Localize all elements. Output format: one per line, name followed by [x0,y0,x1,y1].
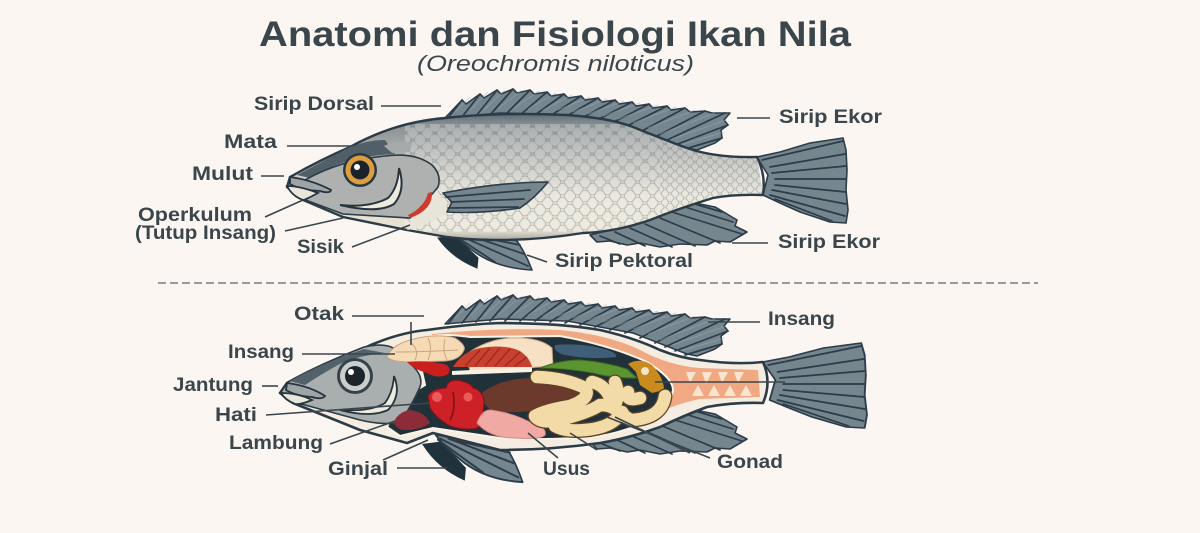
eye [337,358,373,394]
organ: blue kidney [555,344,616,358]
label: Lambung: Lambung [229,433,323,454]
label: Sirip Ekor lower: Sirip Ekor [778,232,881,253]
title: Anatomi dan Fisiologi Ikan Nila [259,15,852,54]
label: Mulut [192,164,284,185]
label: Jantung: Jantung [173,375,253,396]
organ: dark red lobe [394,410,430,430]
label: Mata: Mata [224,132,278,153]
label: Usus: Usus [543,459,590,480]
body cavity [387,335,673,439]
label: Operkulum [138,200,303,226]
external fish illustration [287,89,848,270]
label: Insang left: Insang [228,342,294,363]
label: Mata [224,132,352,153]
organ: heart [428,380,484,429]
subtitle: (Oreochromis niloticus) [417,51,694,76]
label: Insang right [708,309,835,330]
label: Mulut: Mulut [192,164,254,185]
pointer: tail muscle line [655,381,785,383]
label: Gonad: Gonad [717,452,783,473]
organ: red gills [452,347,532,375]
fish body outline [280,323,768,450]
label: Operkulum: Operkulum [138,205,252,226]
organ: pink stomach [477,410,545,439]
label: Hati [215,403,430,426]
label: Ginjal [328,440,447,480]
label: Sisik [297,225,410,258]
organ: brain [387,336,553,372]
label: Gonad [570,417,783,473]
label: Insang right: Insang [768,309,835,330]
muscle band [432,329,760,418]
fish head [297,140,450,230]
eye [343,153,377,187]
label: Tutup Insang [135,218,343,244]
label: Tutup Insang: (Tutup Insang) [135,223,276,244]
organ: brown liver [482,376,590,412]
label: Otak [294,304,424,345]
muscle teeth [686,372,752,396]
label: Ginjal: Ginjal [328,459,388,480]
organ: orange gland [628,361,664,393]
label: Otak: Otak [294,304,345,325]
label: Sisik: Sisik [297,237,344,258]
internal fish illustration [280,295,867,482]
mouth [287,177,331,200]
fish head cut [281,345,421,424]
dashed divider [158,282,1038,284]
label: Sirip Pektoral: Sirip Pektoral [555,251,693,272]
pectoral fin [443,182,548,212]
organ: small red lobe [407,361,450,377]
label: Lambung [229,421,395,454]
label: Hati: Hati [215,405,257,426]
organ: green gut [540,360,637,378]
label: Sirip Dorsal: Sirip Dorsal [254,94,374,115]
organ: intestines [535,377,665,430]
fish body with scales [287,114,765,240]
mouth [281,383,325,404]
label: Sirip Ekor upper: Sirip Ekor [779,107,883,128]
label: Usus [528,433,590,480]
